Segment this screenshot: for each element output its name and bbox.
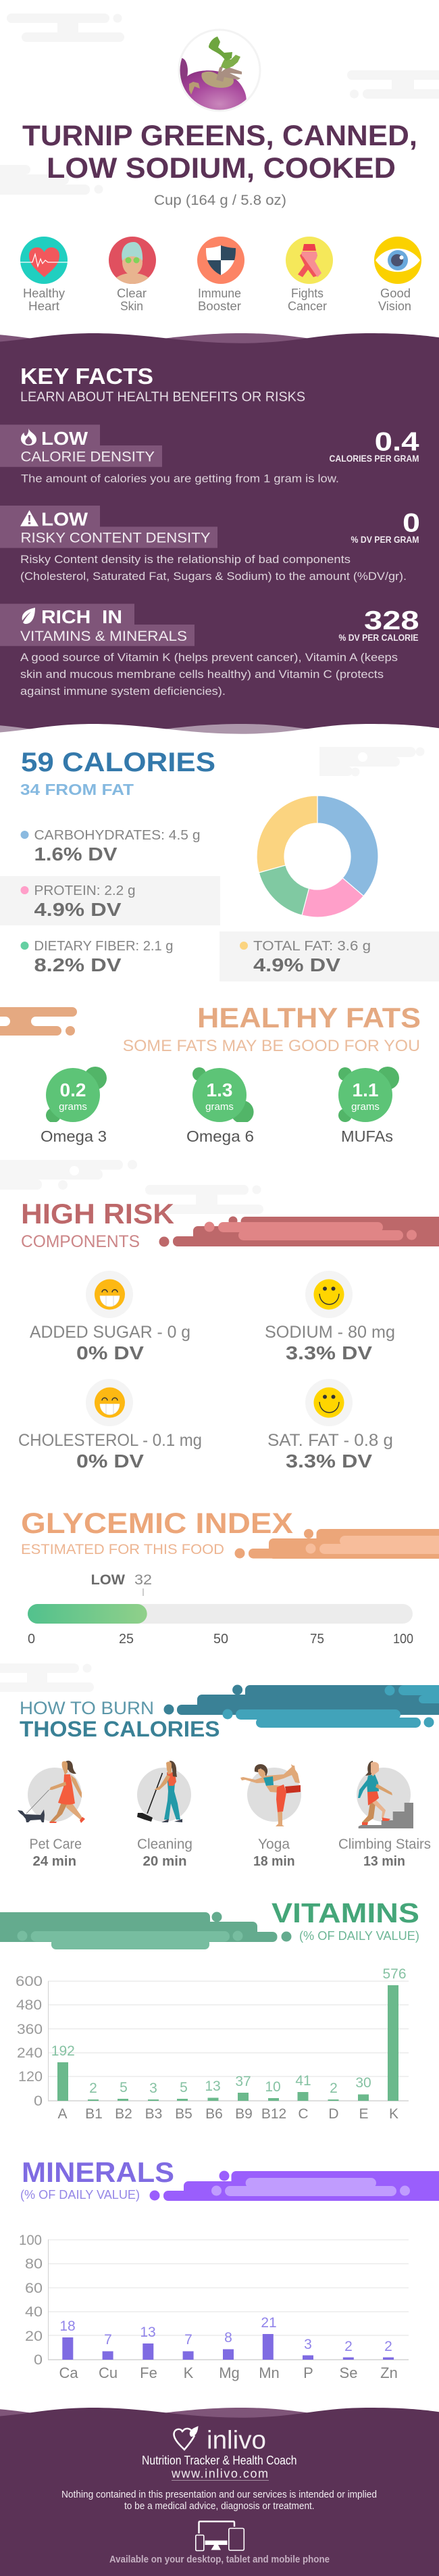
legend: dietary fiber: 8.2% DV <box>34 954 122 975</box>
icon: immune booster: Booster <box>198 299 241 313</box>
fact: low calorie density: 0.4 <box>375 428 419 457</box>
fact: rich in vitamins and minerals: A good source of Vitamin K (helps prevent cancer), Vitamin A (keeps <box>20 651 398 664</box>
bar chart: minerals: Ca <box>59 2364 78 2381</box>
decorative cloud <box>0 1912 292 1949</box>
heading: glycemic index <box>21 1507 293 1557</box>
bar chart: minerals: 7 <box>184 2332 192 2348</box>
panel: high risk <box>18 1198 439 1472</box>
heading: high risk <box>21 1198 174 1251</box>
bar chart: vitamins: 480 <box>16 1997 42 2013</box>
bar chart: minerals: 13 <box>140 2325 156 2340</box>
gauge axis: 50 <box>213 1632 228 1647</box>
bar chart: vitamins: 2 <box>330 2081 338 2096</box>
legend: dietary fiber: DIETARY FIBER: 2.1 g <box>34 939 173 954</box>
gauge axis <box>28 1632 413 1647</box>
panel: vitamins <box>0 1897 419 2122</box>
decorative clouds: header <box>0 14 439 195</box>
panel: healthy fats <box>0 1002 421 1145</box>
legend: total fat <box>220 931 439 981</box>
bar chart: minerals: 0 <box>34 2352 43 2368</box>
bar chart: vitamins: B1 <box>85 2106 103 2122</box>
bar chart: vitamins: 30 <box>355 2075 371 2091</box>
bar chart: minerals: 8 <box>224 2330 232 2346</box>
risk: cholesterol <box>18 1379 202 1472</box>
risk: sodium: 3.3% DV <box>286 1342 372 1363</box>
heading: how to burn those calories: HOW TO BURN <box>20 1698 154 1718</box>
bar chart: minerals: Mn <box>259 2364 280 2381</box>
fact: low risky content density: (Cholesterol, Saturated Fat, Sugars & Sodium) to the amount (%DV/gr). <box>20 570 407 583</box>
activity: pet care <box>18 1761 85 1869</box>
activity: climbing stairs <box>338 1761 431 1869</box>
decorative cloud <box>159 1217 439 1246</box>
disclaimer: to be a medical advice, diagnosis or treatment. <box>124 2500 315 2512</box>
bar chart: vitamins: 37 <box>235 2074 251 2089</box>
icon: immune booster: Immune <box>198 287 241 300</box>
bar chart: vitamins: 576 <box>382 1966 407 1982</box>
fact: rich in vitamins and minerals: 328 <box>364 606 419 635</box>
heading: calories: 59 CALORIES <box>21 748 215 777</box>
heading: key facts <box>20 364 305 404</box>
bar chart: minerals: K <box>184 2364 194 2381</box>
panel: minerals <box>19 2156 439 2381</box>
panel: footer <box>0 2408 439 2576</box>
fat: mufas: MUFAs <box>341 1127 393 1145</box>
fact: low calorie density <box>0 424 419 485</box>
bar chart: vitamins: B3 <box>145 2106 162 2122</box>
heading: glycemic index: GLYCEMIC INDEX <box>21 1507 293 1540</box>
gauge label: LOW <box>91 1572 125 1588</box>
heading: high risk: HIGH RISK <box>21 1198 174 1230</box>
heading: how to burn those calories <box>20 1698 220 1741</box>
footer url: www.inlivo.com <box>171 2467 268 2481</box>
fact: rich in vitamins and minerals: skin and mucous membrane cells healthy) and Vitamin C (protects <box>20 668 384 681</box>
bar chart: minerals: Zn <box>380 2364 398 2381</box>
icon: fights cancer ribbon: Fights <box>291 287 324 300</box>
bar chart: minerals: Cu <box>99 2364 118 2381</box>
fact: low risky content density: Risky Content density is the relationship of bad components <box>20 553 351 566</box>
gauge axis: 75 <box>310 1632 324 1647</box>
fat: omega 3: Omega 3 <box>41 1127 107 1145</box>
decorative cloud <box>150 2171 439 2201</box>
heading: calories <box>20 748 215 798</box>
disclaimer: Nothing contained in this presentation and our services is intended or implied <box>61 2489 377 2500</box>
fact: low calorie density: CALORIE DENSITY <box>20 449 155 465</box>
fact: low calorie density: CALORIES PER GRAM <box>330 454 419 464</box>
risk: cholesterol: 0% DV <box>76 1451 144 1472</box>
heading: vitamins: (% OF DAILY VALUE) <box>299 1929 419 1943</box>
fact: rich in vitamins and minerals: RICH IN <box>41 606 122 627</box>
icon: clear skin <box>109 237 156 313</box>
risk: added sugar: ADDED SUGAR - 0 g <box>30 1323 190 1342</box>
activity: pet care: Pet Care <box>30 1837 82 1852</box>
heading: healthy fats: HEALTHY FATS <box>197 1002 421 1034</box>
bar chart: vitamins: 192 <box>51 2043 75 2059</box>
gauge label <box>91 1572 152 1596</box>
risk: saturated fat <box>267 1379 393 1472</box>
bar chart: minerals: 100 <box>19 2233 42 2248</box>
icon: clear skin: Skin <box>120 299 143 313</box>
fact: low risky content density: 0 <box>403 508 420 537</box>
heading: how to burn those calories: THOSE CALORIES <box>20 1717 220 1741</box>
footer tagline: Nutrition Tracker & Health Coach <box>142 2454 297 2467</box>
heading: vitamins <box>272 1897 419 1943</box>
bar chart: minerals: 2 <box>344 2339 353 2354</box>
bar chart: vitamins: 5 <box>120 2080 128 2095</box>
risk: saturated fat: 3.3% DV <box>286 1451 372 1472</box>
heading: key facts: KEY FACTS <box>20 364 153 389</box>
bar chart: vitamins <box>16 1966 409 2122</box>
legend: carbohydrates: 1.6% DV <box>34 844 118 865</box>
fat: omega 3: 0.2 <box>60 1079 86 1100</box>
bar chart: vitamins: B2 <box>115 2106 132 2122</box>
gauge axis: 0 <box>28 1632 35 1647</box>
decorative cloud <box>0 1007 77 1036</box>
bar chart: vitamins: 2 <box>89 2081 97 2096</box>
heading: glycemic index: ESTIMATED FOR THIS FOOD <box>21 1542 224 1557</box>
icon: good vision eye: Good <box>380 287 411 300</box>
heading: calories: 34 FROM FAT <box>20 781 134 798</box>
risk: cholesterol: CHOLESTEROL - 0.1 mg <box>18 1431 202 1450</box>
icon: healthy heart: Healthy <box>23 287 65 300</box>
fact: rich in vitamins and minerals <box>0 604 419 698</box>
activity: yoga: 18 min <box>253 1854 295 1869</box>
fat: omega 6 <box>186 1067 254 1145</box>
heading: healthy fats <box>123 1002 421 1055</box>
bar chart: vitamins: B12 <box>261 2106 286 2122</box>
icon: fights cancer ribbon: Cancer <box>288 299 327 313</box>
bar chart: minerals: 18 <box>59 2318 76 2334</box>
fact: low risky content density: % DV PER GRAM <box>351 535 419 545</box>
legend: carbohydrates <box>20 828 200 865</box>
fact: low risky content density: LOW <box>41 508 88 529</box>
serving size: Cup (164 g / 5.8 oz) <box>154 193 286 208</box>
title: LOW SODIUM, COOKED <box>47 152 396 185</box>
fact: low calorie density: The amount of calories you are getting from 1 gram is low. <box>21 472 339 485</box>
activity: cleaning: 20 min <box>143 1854 186 1869</box>
bar chart: vitamins: 0 <box>34 2093 43 2109</box>
heading: vitamins: VITAMINS <box>272 1897 419 1928</box>
panel: how to burn calories <box>18 1684 439 1869</box>
icon: fights cancer ribbon <box>286 237 333 313</box>
decorative cloud: before burn <box>0 1663 94 1692</box>
bar chart: minerals: P <box>303 2364 313 2381</box>
gauge axis: 100 <box>393 1632 413 1647</box>
heading: minerals: MINERALS <box>22 2156 174 2188</box>
fact: rich in vitamins and minerals: % DV PER CALORIE <box>339 633 419 643</box>
title <box>22 120 417 185</box>
decorative cloud <box>235 1529 439 1559</box>
risk: saturated fat: SAT. FAT - 0.8 g <box>267 1431 393 1450</box>
icon: immune booster <box>197 237 244 313</box>
bar chart: vitamins: 41 <box>295 2073 311 2089</box>
icon: good vision eye: Vision <box>378 299 411 313</box>
activity: yoga <box>240 1764 301 1869</box>
risk: sodium: SODIUM - 80 mg <box>265 1323 395 1342</box>
activity: pet care: 24 min <box>32 1854 76 1869</box>
availability note: Available on your desktop, tablet and mobile phone <box>109 2554 330 2565</box>
bar chart: minerals: 21 <box>261 2315 277 2331</box>
heading: healthy fats: SOME FATS MAY BE GOOD FOR YOU <box>123 1037 420 1055</box>
donut chart: macronutrients <box>257 796 378 917</box>
bar chart: vitamins: D <box>328 2106 339 2122</box>
activity: cleaning: Cleaning <box>137 1837 192 1852</box>
legend: dietary fiber <box>20 939 173 975</box>
decorative clouds: before high risk <box>0 1160 263 1214</box>
icon: devices <box>196 2521 244 2551</box>
heading: high risk: COMPONENTS <box>21 1232 140 1251</box>
food image: turnip in circle <box>176 30 260 112</box>
bar chart: minerals: Mg <box>219 2364 240 2381</box>
bar chart: vitamins: 5 <box>180 2080 188 2095</box>
legend: protein <box>0 876 220 925</box>
legend: total fat: 4.9% DV <box>253 954 340 975</box>
legend: total fat: TOTAL FAT: 3.6 g <box>253 939 371 954</box>
fat: omega 6: grams <box>205 1101 234 1113</box>
bar chart: vitamins: B5 <box>175 2106 192 2122</box>
legend: carbohydrates: CARBOHYDRATES: 4.5 g <box>34 828 200 843</box>
bar chart: vitamins: 120 <box>18 2069 43 2085</box>
bar chart: minerals: 60 <box>25 2281 43 2296</box>
icon: warning triangle <box>20 510 38 526</box>
bar chart: minerals: Fe <box>140 2364 157 2381</box>
logo: inlivo <box>174 2426 266 2455</box>
bar chart: vitamins: E <box>359 2106 369 2122</box>
panel: glycemic index <box>21 1507 439 1647</box>
bar chart: minerals: 40 <box>25 2304 43 2320</box>
icon: clear skin: Clear <box>117 287 147 300</box>
activity: yoga: Yoga <box>258 1837 290 1852</box>
bar chart: minerals: 7 <box>104 2332 112 2348</box>
fat: omega 3: grams <box>59 1101 87 1113</box>
decorative cloud <box>319 747 424 776</box>
fat: omega 6: Omega 6 <box>186 1127 254 1145</box>
fact: rich in vitamins and minerals: VITAMINS & MINERALS <box>20 629 187 644</box>
legend: protein: PROTEIN: 2.2 g <box>34 883 135 898</box>
heading: minerals <box>20 2156 174 2202</box>
risk: added sugar: 0% DV <box>76 1342 144 1363</box>
panel: calories <box>0 747 439 981</box>
bar chart: vitamins: 360 <box>17 2022 43 2037</box>
bar chart: vitamins: 600 <box>16 1974 43 1989</box>
activity: climbing stairs: Climbing Stairs <box>338 1837 431 1852</box>
risk: added sugar <box>30 1271 190 1363</box>
legend: protein: 4.9% DV <box>34 899 122 920</box>
bar chart: vitamins: 10 <box>265 2079 281 2095</box>
fat: mufas: grams <box>351 1101 380 1113</box>
heading: key facts: LEARN ABOUT HEALTH BENEFITS OR RISKS <box>20 389 305 404</box>
icon: good vision eye <box>374 237 421 313</box>
icon: healthy heart: Heart <box>28 299 59 313</box>
bar chart: vitamins: 240 <box>17 2045 43 2061</box>
title: TURNIP GREENS, CANNED, <box>22 120 417 152</box>
fat: omega 6: 1.3 <box>207 1079 232 1100</box>
bar chart: minerals: 80 <box>25 2256 43 2272</box>
bar chart: minerals: 20 <box>25 2329 43 2344</box>
icon: leaf <box>22 608 35 624</box>
disclaimer <box>61 2489 377 2512</box>
bar chart: vitamins: C <box>298 2106 309 2122</box>
bar chart: minerals: 2 <box>384 2339 392 2354</box>
gauge bar <box>28 1604 413 1624</box>
activity: cleaning <box>137 1761 192 1869</box>
decorative cloud <box>163 1684 439 1728</box>
fact: rich in vitamins and minerals: against immune system deficiencies). <box>20 685 226 698</box>
bar chart: minerals: Se <box>340 2364 357 2381</box>
icon: flame <box>21 428 36 445</box>
risk: sodium <box>265 1271 395 1363</box>
bar chart: vitamins: 3 <box>149 2081 157 2096</box>
fat: omega 3 <box>41 1067 107 1145</box>
fat: mufas: 1.1 <box>353 1079 378 1100</box>
bar chart: minerals <box>19 2233 409 2381</box>
fat: mufas <box>338 1067 399 1145</box>
bar chart: minerals: 3 <box>304 2337 312 2352</box>
icon: healthy heart <box>20 237 68 313</box>
panel: key facts <box>0 333 439 740</box>
fact: low risky content density: RISKY CONTENT DENSITY <box>20 531 211 546</box>
gauge label: 32 <box>134 1572 152 1588</box>
heading: minerals: (% OF DAILY VALUE) <box>20 2188 140 2202</box>
activity: climbing stairs: 13 min <box>363 1854 405 1869</box>
benefit icons row <box>20 237 421 313</box>
bar chart: vitamins: A <box>57 2106 68 2122</box>
fact: low calorie density: LOW <box>41 428 88 449</box>
gauge axis: 25 <box>119 1632 134 1647</box>
bar chart: vitamins: B9 <box>235 2106 253 2122</box>
logo: inlivo: inlivo <box>207 2427 266 2455</box>
bar chart: vitamins: B6 <box>205 2106 223 2122</box>
fact: low risky content density <box>0 506 420 583</box>
bar chart: vitamins: 13 <box>205 2079 221 2094</box>
bar chart: vitamins: K <box>389 2106 398 2122</box>
